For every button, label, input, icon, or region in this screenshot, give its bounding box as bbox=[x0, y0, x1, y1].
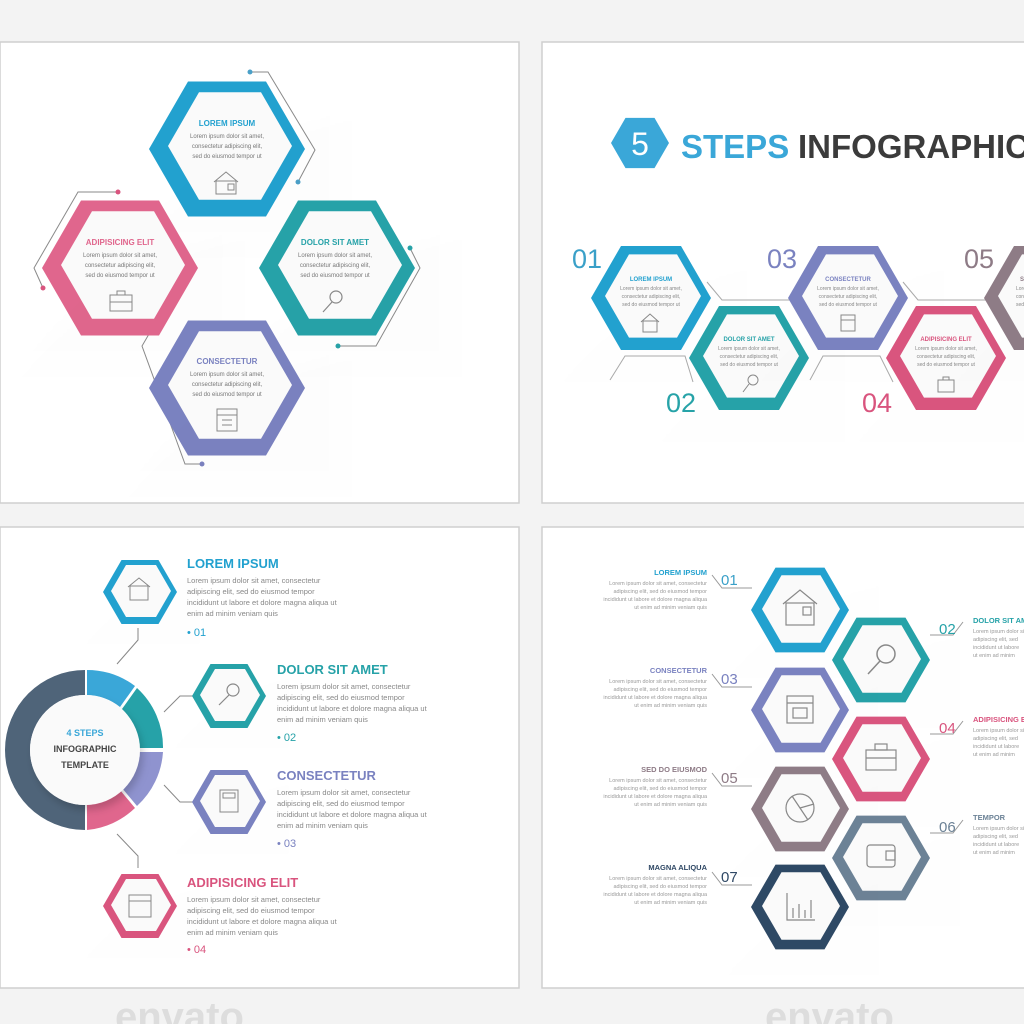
left labels: 01 bbox=[721, 572, 738, 589]
watermark bbox=[115, 995, 894, 1024]
left labels: ut enim ad minim veniam quis bbox=[634, 900, 707, 906]
step 04 bbox=[862, 306, 1006, 418]
left labels: Lorem ipsum dolor sit amet, consectetur bbox=[609, 581, 707, 587]
hexagon: adipisicing elit: consectetur adipiscing elit, bbox=[85, 263, 156, 269]
step 03: 03 bbox=[767, 244, 797, 274]
left labels: SED DO EIUSMOD bbox=[641, 765, 708, 774]
hexagon: adipisicing elit: ADIPISICING ELIT bbox=[86, 238, 154, 247]
hexagon: lorem ipsum bbox=[149, 81, 305, 217]
item 03: incididunt ut labore et dolore magna aliqua ut bbox=[277, 810, 428, 819]
hexagon: consectetur: CONSECTETUR bbox=[197, 357, 258, 366]
item 02: enim ad minim veniam quis bbox=[277, 715, 368, 724]
left labels: incididunt ut labore et dolore magna aliqua bbox=[603, 892, 708, 898]
icon: house bbox=[214, 172, 238, 194]
left labels: adipiscing elit, sed bbox=[973, 834, 1018, 840]
title: 5 bbox=[631, 126, 649, 162]
item 02: adipiscing elit, sed do eiusmod tempor bbox=[277, 693, 405, 702]
item 04: Lorem ipsum dolor sit amet, consectetur bbox=[187, 895, 321, 904]
left labels: ut enim ad minim veniam quis bbox=[634, 802, 707, 808]
item 01: Lorem ipsum dolor sit amet, consectetur bbox=[187, 576, 321, 585]
hexagon: lorem ipsum: LOREM IPSUM bbox=[199, 119, 256, 128]
step 02: DOLOR SIT AMET bbox=[723, 337, 775, 343]
step 04: Lorem ipsum dolor sit amet, bbox=[915, 346, 977, 352]
left labels: adipiscing elit, sed do eiusmod tempor bbox=[613, 786, 707, 792]
hex 02 bbox=[832, 618, 930, 702]
step 02: consectetur adipiscing elit, bbox=[720, 354, 778, 360]
step 02: sed do eiusmod tempor ut bbox=[720, 362, 779, 368]
ring chart: 4 STEPS bbox=[66, 728, 104, 738]
hexagon: dolor sit amet: sed do eiusmod tempor ut bbox=[300, 273, 370, 279]
item 04: ADIPISICING ELIT bbox=[187, 875, 298, 890]
icon: briefcase bbox=[110, 291, 132, 311]
step 04: consectetur adipiscing elit, bbox=[917, 354, 975, 360]
ring chart: INFOGRAPHIC bbox=[54, 744, 117, 754]
left labels: adipiscing elit, sed do eiusmod tempor bbox=[613, 589, 707, 595]
step 03: sed do eiusmod tempor ut bbox=[819, 302, 878, 308]
item 02: incididunt ut labore et dolore magna aliqua ut bbox=[277, 704, 428, 713]
title: STEPS bbox=[681, 128, 789, 165]
hexagon: dolor sit amet bbox=[259, 200, 415, 336]
left labels: incididunt ut labore bbox=[973, 842, 1019, 848]
step 04: 04 bbox=[862, 388, 892, 418]
title: INFOGRAPHIC bbox=[798, 128, 1024, 165]
hexagon: dolor sit amet: Lorem ipsum dolor sit amet, bbox=[298, 253, 372, 259]
step 01: consectetur adipiscing elit, bbox=[622, 294, 680, 300]
left labels bbox=[603, 568, 1024, 906]
panel: 5 steps infographic bbox=[542, 42, 1024, 503]
item 03: CONSECTETUR bbox=[277, 768, 377, 783]
step 03: CONSECTETUR bbox=[825, 277, 871, 283]
item 02: Lorem ipsum dolor sit amet, consectetur bbox=[277, 682, 411, 691]
hex 07 bbox=[751, 865, 849, 949]
item 03: • 03 bbox=[277, 838, 296, 850]
hexagon: consectetur bbox=[149, 320, 305, 456]
item 02 bbox=[192, 662, 428, 744]
item 03 bbox=[192, 768, 428, 850]
left labels: ut enim ad minim bbox=[973, 752, 1015, 758]
left labels: incididunt ut labore et dolore magna aliqua bbox=[603, 695, 708, 701]
hexagon: dolor sit amet: consectetur adipiscing elit, bbox=[300, 263, 371, 269]
left labels: adipiscing elit, sed bbox=[973, 637, 1018, 643]
item 04 bbox=[103, 874, 338, 956]
item 04: incididunt ut labore et dolore magna aliqua ut bbox=[187, 917, 338, 926]
step 05: 05 bbox=[964, 244, 994, 274]
left labels: Lorem ipsum dolor sit amet, consectetur bbox=[609, 778, 707, 784]
item 04: enim ad minim veniam quis bbox=[187, 928, 278, 937]
left labels: incididunt ut labore bbox=[973, 744, 1019, 750]
left labels: ut enim ad minim veniam quis bbox=[634, 605, 707, 611]
item 01: incididunt ut labore et dolore magna aliqua ut bbox=[187, 598, 338, 607]
hexagon: consectetur: Lorem ipsum dolor sit amet, bbox=[190, 372, 264, 378]
connector lines top-left bbox=[34, 70, 420, 466]
step 03 bbox=[767, 244, 908, 350]
step 03: consectetur adipiscing elit, bbox=[819, 294, 877, 300]
left labels: CONSECTETUR bbox=[650, 666, 708, 675]
item 04: adipiscing elit, sed do eiusmod tempor bbox=[187, 906, 315, 915]
step 02: Lorem ipsum dolor sit amet, bbox=[718, 346, 780, 352]
item 01: adipiscing elit, sed do eiusmod tempor bbox=[187, 587, 315, 596]
step 01: Lorem ipsum dolor sit amet, bbox=[620, 286, 682, 292]
hex 04 bbox=[832, 717, 930, 801]
step 01: LOREM IPSUM bbox=[630, 277, 672, 283]
step 03: Lorem ipsum dolor sit amet, bbox=[817, 286, 879, 292]
left labels: Lorem ipsum dolor sit amet, consectetur bbox=[609, 679, 707, 685]
panel: four hexagons bbox=[0, 42, 519, 503]
hexagon: adipisicing elit: sed do eiusmod tempor ut bbox=[85, 273, 155, 279]
hexagon: consectetur: sed do eiusmod tempor ut bbox=[192, 392, 262, 398]
connectors bbox=[610, 280, 986, 382]
hexagon: adipisicing elit bbox=[42, 200, 198, 336]
hexagon: dolor sit amet: DOLOR SIT AMET bbox=[301, 238, 369, 247]
hexagon: lorem ipsum: Lorem ipsum dolor sit amet, bbox=[190, 134, 264, 140]
left labels: 03 bbox=[721, 671, 738, 688]
hexagon: adipisicing elit: Lorem ipsum dolor sit amet, bbox=[83, 253, 157, 259]
left labels: TEMPOR bbox=[973, 813, 1006, 822]
item 02: DOLOR SIT AMET bbox=[277, 662, 388, 677]
ring chart bbox=[5, 670, 163, 830]
left labels: ut enim ad minim bbox=[973, 850, 1015, 856]
icon: magnifier bbox=[323, 291, 342, 312]
left labels: adipiscing elit, sed bbox=[973, 736, 1018, 742]
left labels: incididunt ut labore bbox=[973, 645, 1019, 651]
left labels: MAGNA ALIQUA bbox=[648, 863, 708, 872]
item 03: adipiscing elit, sed do eiusmod tempor bbox=[277, 799, 405, 808]
item 02: • 02 bbox=[277, 732, 296, 744]
icon: calendar bbox=[217, 409, 237, 431]
left labels: adipiscing elit, sed do eiusmod tempor bbox=[613, 687, 707, 693]
step 04: sed do eiusmod tempor ut bbox=[917, 362, 976, 368]
item 01 bbox=[103, 556, 338, 639]
panel: 7 steps honeycomb bbox=[542, 527, 1024, 988]
left labels: 06 bbox=[939, 819, 956, 836]
step 01: sed do eiusmod tempor ut bbox=[622, 302, 681, 308]
step 02 bbox=[666, 306, 809, 418]
step 01 bbox=[572, 244, 711, 350]
item 03: enim ad minim veniam quis bbox=[277, 821, 368, 830]
hex 05 bbox=[751, 767, 849, 851]
hex 01 bbox=[751, 568, 849, 652]
item 01: • 01 bbox=[187, 627, 206, 639]
left labels: ut enim ad minim bbox=[973, 653, 1015, 659]
step 01: 01 bbox=[572, 244, 602, 274]
hexagon: consectetur: consectetur adipiscing elit, bbox=[192, 382, 263, 388]
step 02: 02 bbox=[666, 388, 696, 418]
item 03: Lorem ipsum dolor sit amet, consectetur bbox=[277, 788, 411, 797]
hex 03 bbox=[751, 668, 849, 752]
item 04: • 04 bbox=[187, 944, 206, 956]
connectors bbox=[117, 628, 193, 868]
panel: 4 steps ring bbox=[0, 527, 519, 988]
item 01: LOREM IPSUM bbox=[187, 556, 279, 571]
left labels: 05 bbox=[721, 770, 738, 787]
hexagon: lorem ipsum: consectetur adipiscing elit, bbox=[192, 144, 263, 150]
left labels: incididunt ut labore et dolore magna aliqua bbox=[603, 597, 708, 603]
left labels: 02 bbox=[939, 621, 956, 638]
left labels: LOREM IPSUM bbox=[654, 568, 707, 577]
left labels: Lorem ipsum dolor sit amet, consectetur bbox=[609, 876, 707, 882]
hexagon: lorem ipsum: sed do eiusmod tempor ut bbox=[192, 154, 262, 160]
step 04: ADIPISICING ELIT bbox=[920, 337, 972, 343]
left labels: 04 bbox=[939, 720, 956, 737]
ring chart: TEMPLATE bbox=[61, 760, 109, 770]
left labels: ut enim ad minim veniam quis bbox=[634, 703, 707, 709]
title bbox=[611, 118, 1024, 168]
left labels: 07 bbox=[721, 869, 738, 886]
left labels: incididunt ut labore et dolore magna aliqua bbox=[603, 794, 708, 800]
item 01: enim ad minim veniam quis bbox=[187, 609, 278, 618]
left labels: adipiscing elit, sed do eiusmod tempor bbox=[613, 884, 707, 890]
step 05 bbox=[964, 244, 1024, 350]
hex 06 bbox=[832, 816, 930, 900]
